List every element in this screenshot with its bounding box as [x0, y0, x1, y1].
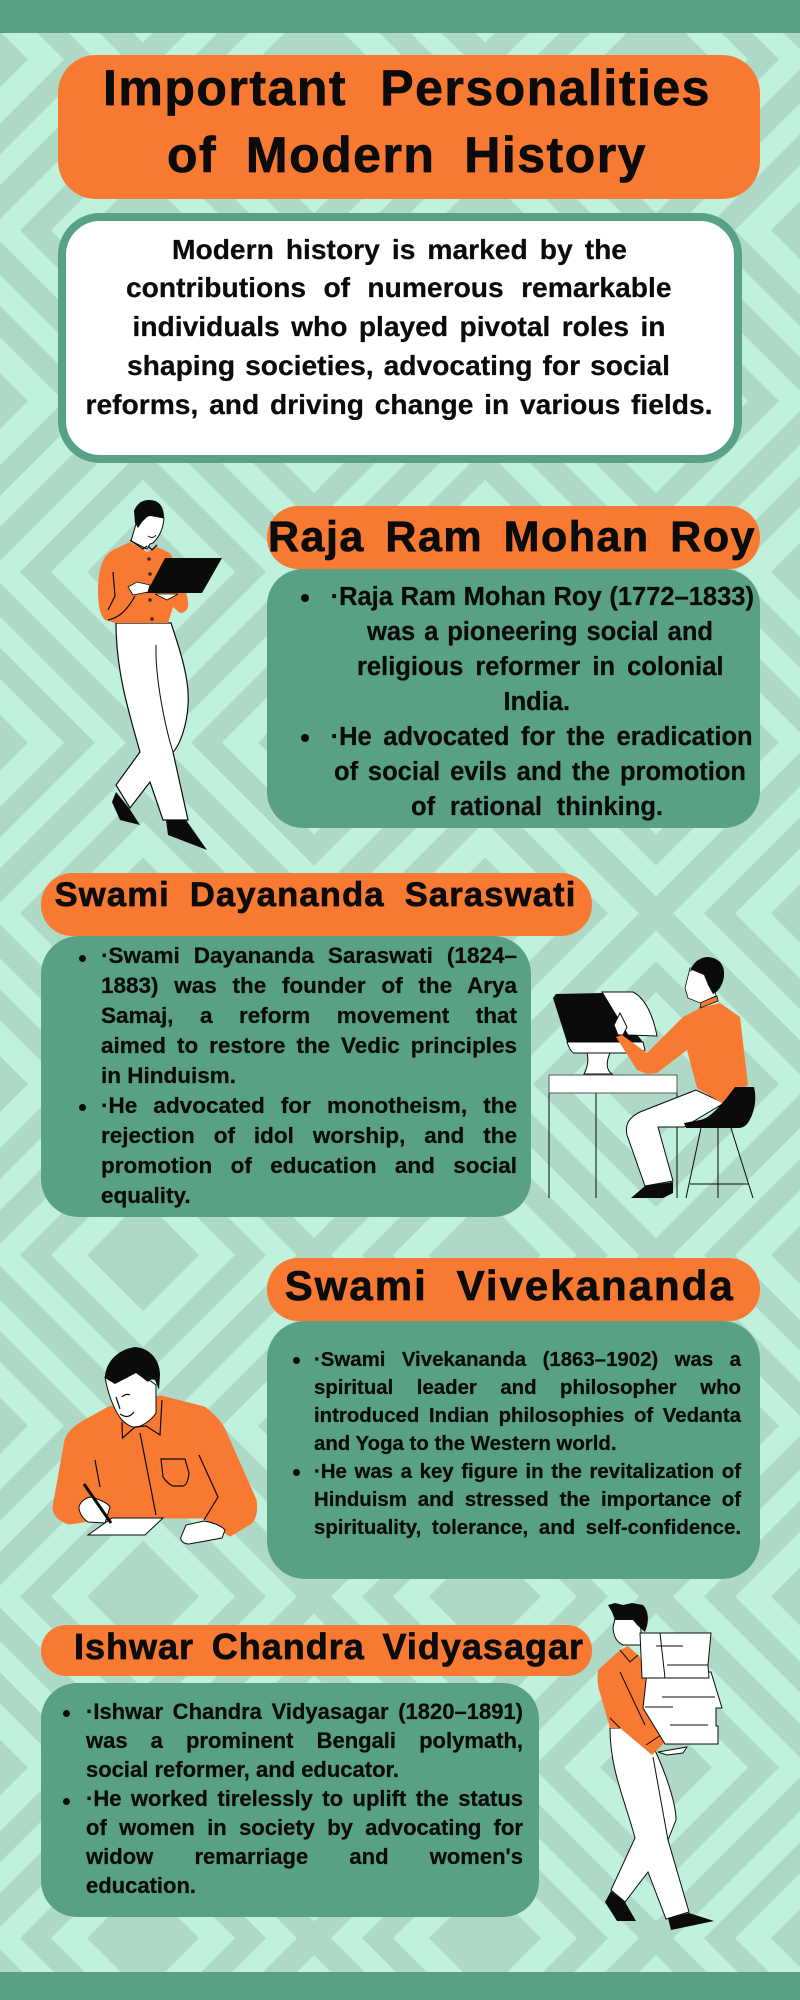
panel: Swami Vivekananda — [267, 1321, 760, 1579]
panel: Raja Ram Mohan Roy — [267, 569, 760, 828]
heading: Swami Vivekananda: Swami Vivekananda — [285, 1262, 735, 1309]
panel: Ishwar Chandra Vidyasagar: widow remarriage and women's — [86, 1844, 523, 1869]
panel: Swami Dayananda Saraswati: rejection of idol worship, and the — [101, 1123, 517, 1148]
intro text box: individuals who played pivotal roles in — [132, 310, 666, 342]
panel: Ishwar Chandra Vidyasagar: education. — [86, 1873, 196, 1898]
panel: Swami Dayananda Saraswati: in Hinduism. — [101, 1063, 236, 1088]
illustration: man writing — [52, 1347, 258, 1544]
heading: Raja Ram Mohan Roy: Raja Ram Mohan Roy — [268, 513, 756, 561]
intro text box: contributions of numerous remarkable — [126, 271, 672, 303]
panel: Ishwar Chandra Vidyasagar: was a prominent Bengali polymath, — [86, 1728, 523, 1753]
panel: Swami Dayananda Saraswati: ·Swami Dayananda Saraswati (1824– — [101, 943, 517, 968]
panel: Swami Vivekananda: ·He was a key figure in the revitalization of — [314, 1461, 741, 1483]
title: of Modern History — [167, 127, 647, 183]
heading: Swami Vivekananda — [267, 1258, 760, 1321]
panel: Raja Ram Mohan Roy: of social evils and the promotion — [334, 758, 746, 786]
panel: Raja Ram Mohan Roy: of rational thinking. — [411, 793, 663, 821]
panel: Swami Vivekananda: and Yoga to the Western world. — [314, 1433, 616, 1455]
intro text box: shaping societies, advocating for social — [127, 349, 670, 381]
panel: Swami Dayananda Saraswati: promotion of education and social — [101, 1153, 517, 1178]
panel: Swami Dayananda Saraswati: ·He advocated for monotheism, the — [101, 1093, 517, 1118]
panel: Raja Ram Mohan Roy: ·Raja Ram Mohan Roy (1772–1833) — [331, 583, 754, 611]
bottom bar — [0, 1972, 800, 2000]
panel: Swami Vivekananda: spiritual leader and philosopher who — [314, 1377, 741, 1399]
illustration: man with laptop — [98, 500, 222, 850]
panel: Ishwar Chandra Vidyasagar — [41, 1683, 539, 1917]
panel: Raja Ram Mohan Roy: India. — [504, 688, 570, 716]
heading: Ishwar Chandra Vidyasagar: Ishwar Chandra Vidyasagar — [74, 1626, 584, 1666]
panel: Ishwar Chandra Vidyasagar: of women in society by advocating for — [86, 1815, 523, 1840]
title: Important Personalities — [103, 60, 711, 116]
panel: Ishwar Chandra Vidyasagar: social reformer, and educator. — [86, 1757, 399, 1782]
panel: Swami Vivekananda: spirituality, tolerance, and self-confidence. — [314, 1517, 741, 1539]
panel: Raja Ram Mohan Roy: ·He advocated for the eradication — [331, 723, 753, 751]
panel: Swami Vivekananda: ·Swami Vivekananda (1863–1902) was a — [314, 1349, 741, 1371]
title — [58, 55, 760, 199]
heading: Swami Dayananda Saraswati: Swami Dayananda Saraswati — [55, 876, 577, 914]
panel: Raja Ram Mohan Roy: religious reformer in colonial — [357, 653, 724, 681]
panel: Ishwar Chandra Vidyasagar: ·Ishwar Chandra Vidyasagar (1820–1891) — [86, 1699, 523, 1724]
illustration: man carrying boxes — [598, 1603, 723, 1930]
intro text box: reforms, and driving change in various fields. — [86, 388, 712, 420]
panel: Ishwar Chandra Vidyasagar: ·He worked tirelessly to uplift the status — [86, 1786, 523, 1811]
panel: Swami Dayananda Saraswati: Samaj, a reform movement that — [101, 1003, 517, 1028]
intro text box: Modern history is marked by the — [172, 233, 627, 265]
panel: Swami Vivekananda: introduced Indian philosophies of Vedanta — [314, 1405, 741, 1427]
heading: Swami Dayananda Saraswati — [41, 873, 592, 936]
panel: Swami Vivekananda: Hinduism and stressed the importance of — [314, 1489, 741, 1511]
illustration: man at desk — [548, 957, 756, 1198]
panel: Raja Ram Mohan Roy: was a pioneering social and — [367, 618, 713, 646]
panel: Swami Dayananda Saraswati: equality. — [101, 1183, 191, 1208]
intro text box — [58, 213, 742, 463]
top bar — [0, 0, 800, 33]
panel: Swami Dayananda Saraswati: aimed to restore the Vedic principles — [101, 1033, 517, 1058]
panel: Swami Dayananda Saraswati: 1883) was the founder of the Arya — [101, 973, 517, 998]
panel: Swami Dayananda Saraswati — [41, 936, 531, 1217]
